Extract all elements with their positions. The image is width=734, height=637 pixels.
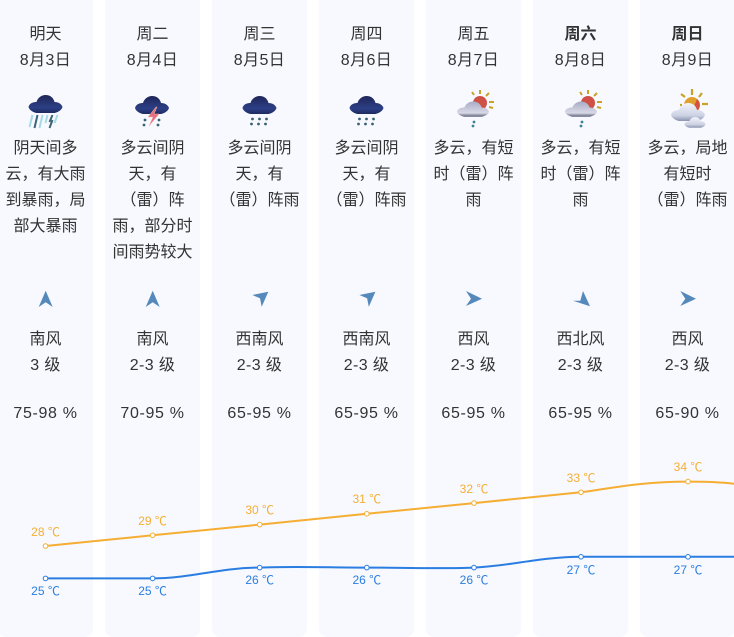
wind text row: 3 级 (30, 357, 61, 374)
day headers row: 周三 (243, 26, 276, 43)
weather descriptions row: （雷）阵雨 (219, 192, 300, 209)
icon: thunderstorm (135, 96, 169, 126)
weather descriptions row: 天，有 (128, 166, 176, 183)
weather descriptions row: （雷）阵雨 (647, 192, 728, 209)
weather descriptions row: 到暴雨，局 (5, 192, 86, 209)
low temperature line: 26 ℃ (352, 573, 381, 587)
low temperature line: 25 ℃ (31, 584, 60, 598)
humidity row: 65-90 % (655, 405, 720, 422)
high temperature line: 30 ℃ (245, 503, 274, 517)
weather descriptions row: 时（雷）阵 (540, 166, 620, 183)
day headers row: 周二 (136, 26, 168, 43)
arrow: northwest wind (573, 291, 590, 306)
weather descriptions row: 阴天间多 (13, 140, 78, 157)
day headers row: 8月6日 (341, 52, 392, 69)
icon: heavy rain (28, 95, 62, 128)
wind text row: 2-3 级 (237, 357, 282, 374)
wind text row: 西风 (671, 331, 704, 348)
high temperature line: 33 ℃ (567, 471, 595, 485)
arrow: south wind (39, 291, 53, 307)
day headers row: 8月9日 (662, 52, 713, 69)
day headers row: 8月4日 (127, 52, 178, 69)
day headers row: 周四 (350, 26, 382, 43)
icon: sun and clouds (671, 89, 708, 128)
icon: cloud sun shower (457, 90, 494, 127)
weather descriptions row: 有短时 (663, 166, 712, 183)
weather descriptions row: 多云，有短 (433, 140, 514, 157)
arrow: southwest wind (359, 292, 375, 307)
day headers row (20, 25, 713, 69)
weather descriptions row: 雨，部分时 (112, 218, 192, 235)
low temperature line: 26 ℃ (245, 573, 274, 587)
low temperature line: 26 ℃ (460, 573, 488, 587)
weather descriptions row: 多云间阴 (120, 140, 184, 157)
arrow: southwest wind (252, 292, 268, 307)
wind text row (29, 330, 710, 374)
weather descriptions row: 部大暴雨 (13, 218, 78, 235)
weather descriptions row: 雨 (572, 192, 588, 209)
high temperature line: 32 ℃ (460, 482, 488, 496)
humidity row: 65-95 % (441, 405, 506, 422)
temperature line chart (31, 460, 734, 598)
humidity row (13, 405, 720, 422)
high temperature line: 29 ℃ (138, 514, 167, 528)
wind text row: 南风 (29, 331, 62, 348)
wind text row: 2-3 级 (665, 357, 710, 374)
arrow: south wind (146, 291, 160, 307)
low temperature line: 25 ℃ (138, 584, 167, 598)
wind text row: 西北风 (556, 331, 604, 348)
day headers row: 周六 (564, 26, 596, 43)
day headers row: 8月8日 (555, 52, 606, 69)
wind text row: 2-3 级 (344, 357, 389, 374)
weather descriptions row: 天，有 (342, 166, 390, 183)
wind text row: 2-3 级 (130, 357, 175, 374)
day headers row: 周日 (671, 26, 704, 43)
weather descriptions row: 多云间阴 (227, 140, 292, 157)
icon: shower (242, 96, 276, 125)
arrow: west wind (466, 291, 482, 306)
weather descriptions row: 天，有 (235, 166, 284, 183)
icon: shower (350, 96, 384, 125)
weather icons row (28, 89, 708, 128)
weather descriptions row: （雷）阵雨 (326, 192, 406, 209)
high temperature line (31, 460, 734, 548)
weather descriptions row: 雨 (465, 192, 482, 209)
day headers row: 明天 (29, 26, 62, 43)
low temperature line: 27 ℃ (567, 563, 595, 577)
weather descriptions row (5, 139, 728, 261)
low temperature line (31, 554, 734, 598)
day headers row: 周五 (457, 26, 490, 43)
high temperature line: 34 ℃ (674, 460, 702, 474)
weather descriptions row: （雷）阵 (120, 192, 184, 209)
weather descriptions row: 多云间阴 (334, 140, 398, 157)
weather descriptions row: 云，有大雨 (5, 166, 86, 183)
wind text row: 南风 (136, 331, 168, 348)
icon: cloud sun shower (565, 90, 602, 127)
day headers row: 8月5日 (234, 52, 285, 69)
humidity row: 75-98 % (13, 405, 78, 422)
low temperature line: 27 ℃ (674, 563, 702, 577)
wind text row: 西风 (457, 331, 490, 348)
day headers row: 8月7日 (448, 52, 499, 69)
weather descriptions row: 多云，有短 (540, 140, 620, 157)
wind text row: 西南风 (342, 331, 390, 348)
high temperature line: 31 ℃ (352, 492, 381, 506)
arrow: west wind (680, 291, 696, 306)
wind text row: 2-3 级 (558, 357, 603, 374)
humidity row: 65-95 % (334, 405, 399, 422)
day headers row: 8月3日 (20, 52, 71, 69)
humidity row: 70-95 % (120, 405, 185, 422)
humidity row: 65-95 % (227, 405, 292, 422)
high temperature line: 28 ℃ (31, 525, 60, 539)
wind text row: 2-3 级 (451, 357, 496, 374)
wind text row: 西南风 (235, 331, 284, 348)
weather descriptions row: 间雨势较大 (112, 244, 192, 261)
weather descriptions row: 多云，局地 (647, 140, 728, 157)
humidity row: 65-95 % (548, 405, 613, 422)
wind direction arrows row (38, 290, 696, 307)
weather descriptions row: 时（雷）阵 (433, 166, 514, 183)
